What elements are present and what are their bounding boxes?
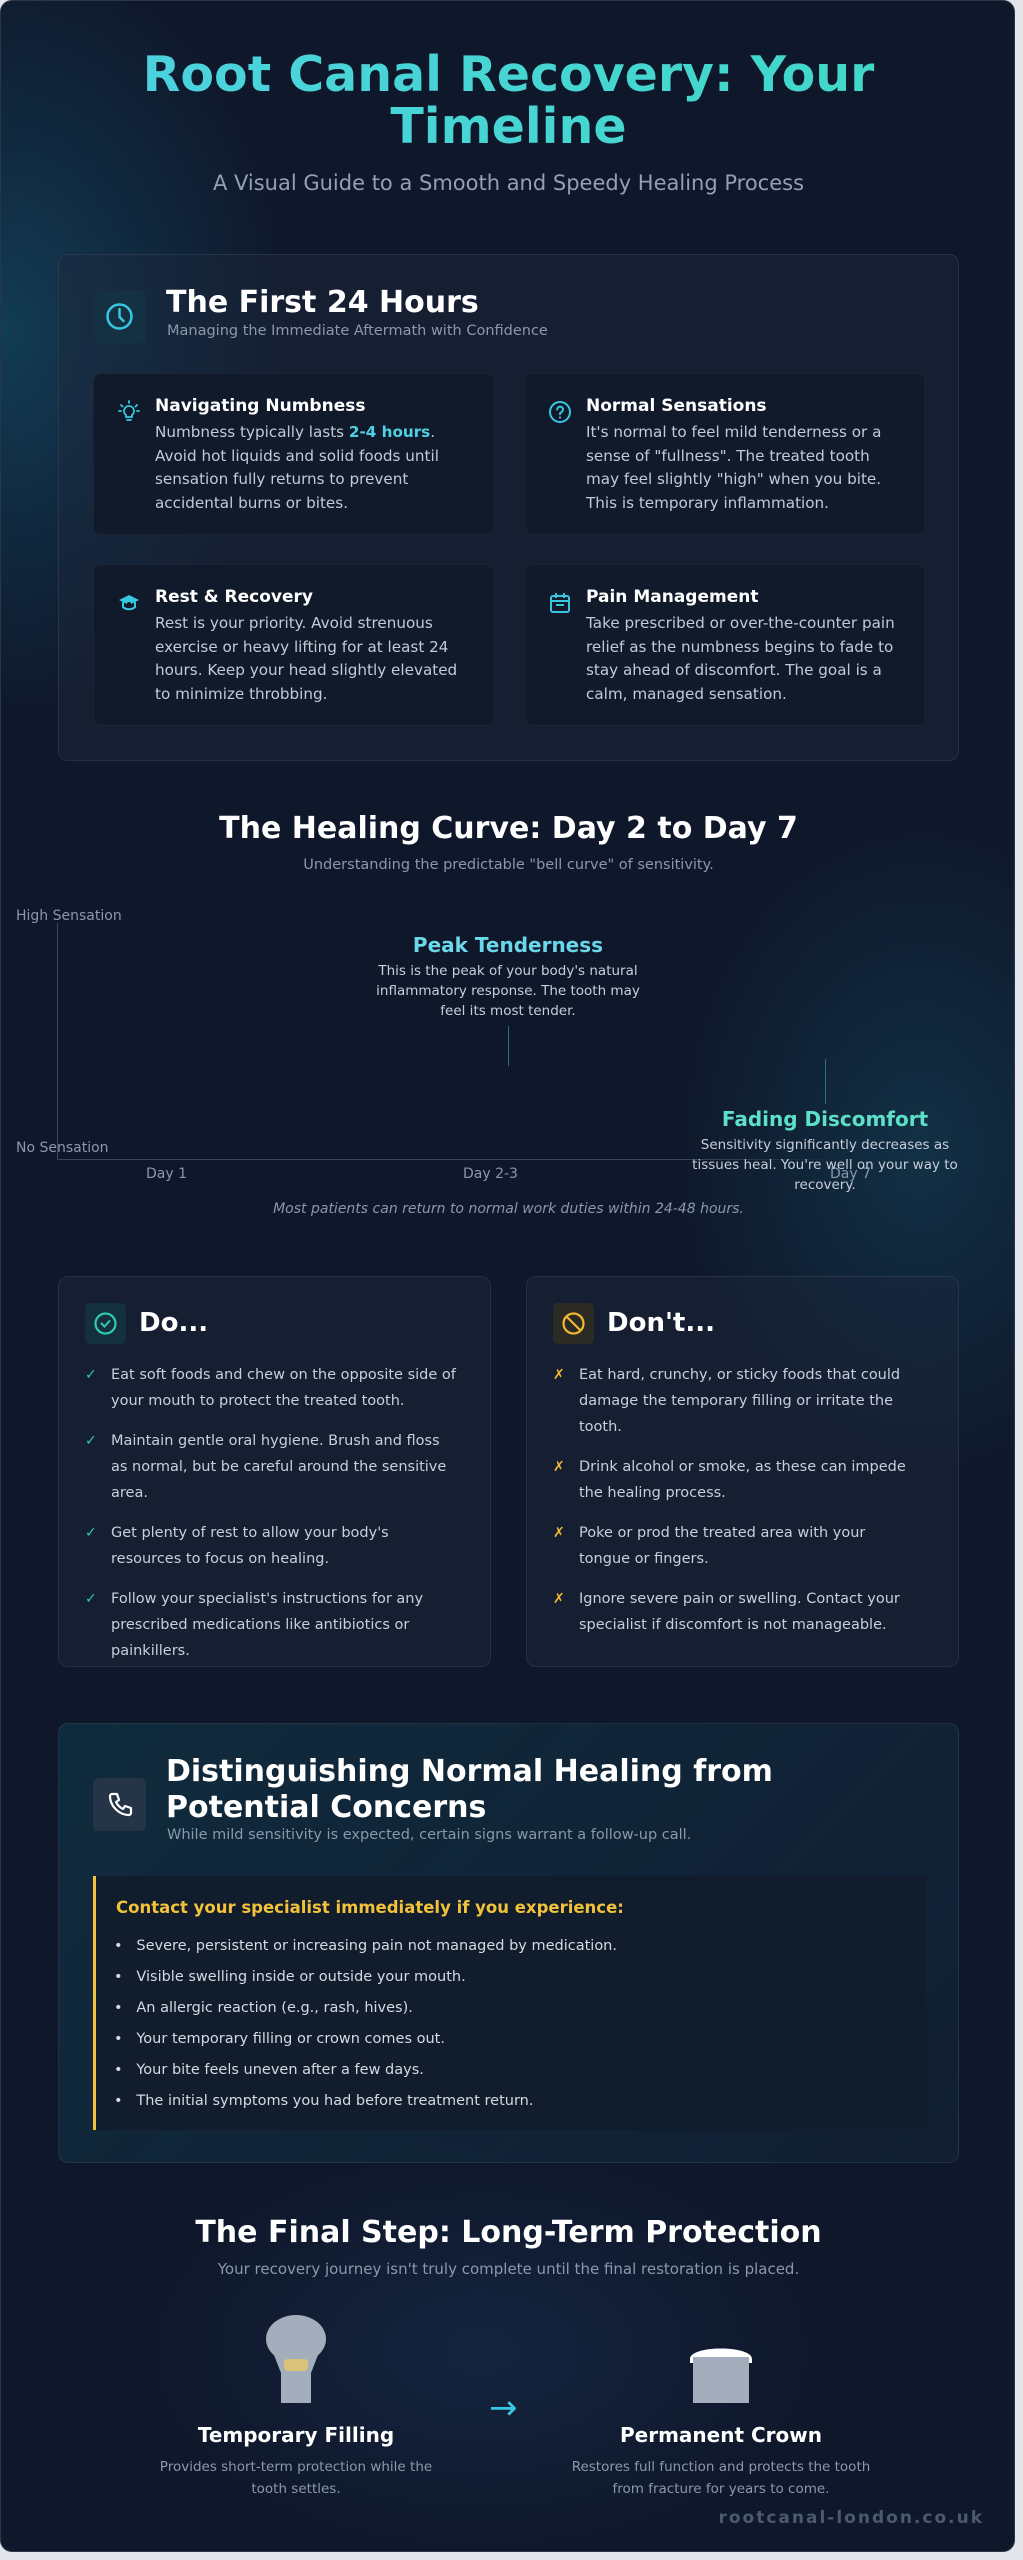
subheading: While mild sensitivity is expected, certain signs warrant a follow-up call.: [167, 1827, 691, 1843]
icon: permanent crown: [690, 2348, 752, 2403]
heading: The First 24 Hours: [166, 285, 479, 320]
list: do: Follow your specialist's instructions for any prescribed medications like antibiotics or painkillers.: [111, 1591, 423, 1659]
card: normal sensations: It's normal to feel mild tenderness or a sense of "fullness". The treated tooth may feel slightly "high" when you bite. This is temporary inflammation.: [586, 423, 881, 512]
card: rest: Rest & Recovery: [155, 587, 313, 607]
panel: concerns: [58, 1723, 959, 2163]
alert box: • The initial symptoms you had before treatment return.: [114, 2093, 533, 2109]
card: numbness: Numbness typically lasts 2-4 hours. Avoid hot liquids and solid foods until sensation fully returns to prevent accidental burns or bites.: [155, 423, 439, 512]
card: pain management: Take prescribed or over-the-counter pain relief as the numbness begins to fade to stay ahead of discomfort. The goal is a calm, managed sensation.: [586, 614, 895, 702]
subheading: Your recovery journey isn't truly complete until the final restoration is placed.: [218, 2260, 799, 2278]
icon: prohibited: [553, 1303, 594, 1344]
subheading: Understanding the predictable "bell curve" of sensitivity.: [303, 857, 714, 873]
label: permanent crown: Restores full function and protects the tooth from fracture for years to come.: [572, 2459, 870, 2497]
card: pain management: [524, 564, 926, 726]
heading: healing curve: The Healing Curve: Day 2 to Day 7: [219, 811, 798, 846]
alert box: • An allergic reaction (e.g., rash, hives).: [114, 2000, 413, 2016]
label: temporary filling: [160, 2423, 432, 2497]
card: pain management: Pain Management: [586, 587, 758, 607]
panel: do: [58, 1276, 491, 1667]
list: dont: ✗: [553, 1591, 565, 1607]
list: do: Get plenty of rest to allow your body's resources to focus on healing.: [111, 1525, 389, 1567]
list: dont: ✗: [553, 1459, 565, 1475]
heading: Distinguishing Normal Healing from Potential Concerns: [166, 1754, 773, 1825]
card: rest: [93, 564, 495, 726]
card: numbness: Navigating Numbness: [155, 396, 365, 416]
list: do: Maintain gentle oral hygiene. Brush and floss as normal, but be careful around the sensitive area.: [111, 1433, 446, 1501]
list: dont: Drink alcohol or smoke, as these can impede the healing process.: [579, 1459, 906, 1501]
list: do: ✓: [85, 1591, 97, 1607]
list: do: [85, 1367, 456, 1659]
chart: healing curve: No Sensation: [16, 1140, 109, 1156]
list: dont: Ignore severe pain or swelling. Contact your specialist if discomfort is not manageable.: [579, 1591, 900, 1633]
label: permanent crown: Permanent Crown: [620, 2423, 822, 2447]
callout: fading discomfort: Fading Discomfort: [722, 1107, 928, 1131]
panel: first 24 hours: [58, 254, 959, 761]
list: do: Eat soft foods and chew on the opposite side of your mouth to protect the treated tooth.: [111, 1367, 456, 1409]
card: rest: Rest is your priority. Avoid strenuous exercise or heavy lifting for at least 24 hours. Keep your head slightly elevated to minimize throbbing.: [155, 614, 457, 702]
label: temporary filling: Temporary Filling: [198, 2423, 394, 2447]
chart: healing curve: [16, 908, 958, 1217]
arrow: →: [489, 2388, 518, 2428]
title: Root Canal Recovery: Your Timeline: [143, 46, 874, 155]
icon: check: [85, 1303, 126, 1344]
heading: Don't...: [607, 1308, 715, 1338]
heading: final step: The Final Step: Long-Term Protection: [195, 2215, 822, 2250]
subheading: Managing the Immediate Aftermath with Confidence: [167, 323, 548, 339]
list: dont: ✗: [553, 1525, 565, 1541]
callout: peak tenderness: Peak Tenderness: [413, 933, 603, 957]
title: [1, 49, 1016, 153]
chart: healing curve: Day 1: [146, 1166, 187, 1182]
alert box: Contact your specialist immediately if you experience:: [116, 1898, 624, 1917]
list: dont: tongue or fingers.: [579, 1551, 709, 1567]
alert box: • Visible swelling inside or outside your mouth.: [114, 1969, 466, 1985]
heading: Do...: [139, 1308, 208, 1338]
card: numbness: [93, 373, 495, 535]
watermark: rootcanal-london.co.uk: [718, 2508, 984, 2528]
note: Most patients can return to normal work duties within 24-48 hours.: [273, 1201, 744, 1217]
callout: peak tenderness: [376, 933, 640, 1019]
label: permanent crown: [572, 2423, 870, 2497]
alert box: • Your bite feels uneven after a few days.: [114, 2062, 424, 2078]
icon: bulb: [118, 400, 140, 421]
callout: fading discomfort: Sensitivity significantly decreases as tissues heal. You're well on your way to recovery.: [692, 1137, 958, 1193]
alert box: • Your temporary filling or crown comes out.: [114, 2031, 445, 2047]
callout: fading discomfort: [692, 1107, 958, 1193]
icon: phone: [93, 1778, 146, 1831]
icon: calendar: [550, 593, 570, 613]
alert box: • Severe, persistent or increasing pain not managed by medication.: [114, 1938, 617, 1954]
list: dont: Eat hard, crunchy, or sticky foods that could damage the temporary filling or irritate the tooth.: [579, 1367, 900, 1435]
card: normal sensations: Normal Sensations: [586, 396, 767, 416]
list: dont: ✗: [553, 1367, 565, 1383]
icon: rest: [119, 595, 139, 610]
list: dont: [553, 1367, 906, 1633]
label: temporary filling: Provides short-term protection while the tooth settles.: [160, 2459, 432, 2497]
icon: clock: [93, 290, 146, 343]
list: do: ✓: [85, 1433, 97, 1449]
chart: healing curve: Day 7: [830, 1166, 871, 1182]
panel: dont: [526, 1276, 959, 1667]
subtitle: A Visual Guide to a Smooth and Speedy Healing Process: [213, 171, 804, 195]
list: dont: Poke or prod the treated area with your: [579, 1525, 865, 1541]
icon: temporary filling tooth: [266, 2315, 326, 2403]
chart: healing curve: High Sensation: [16, 908, 122, 924]
icon: question: [549, 401, 571, 423]
list: do: ✓: [85, 1525, 97, 1541]
callout: peak tenderness: This is the peak of your body's natural inflammatory response. The tooth may feel its most tender.: [376, 963, 640, 1019]
chart: healing curve: Day 2-3: [463, 1166, 518, 1182]
list: do: ✓: [85, 1367, 97, 1383]
alert box: [93, 1876, 926, 2130]
card: normal sensations: [524, 373, 926, 535]
